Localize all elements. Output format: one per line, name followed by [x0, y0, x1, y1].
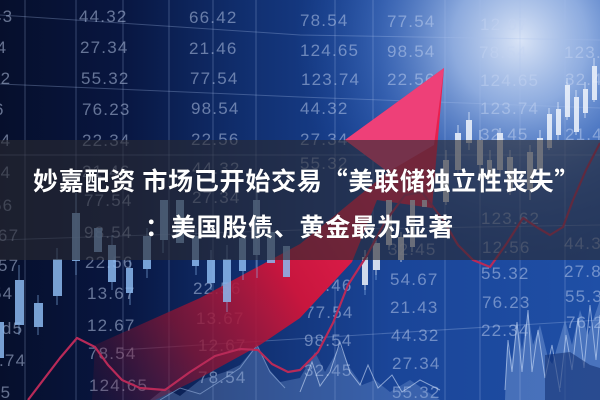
- number grid: 12.56: [482, 238, 531, 257]
- number grid: 22.34: [82, 131, 131, 150]
- number grid: 44.32: [391, 326, 440, 345]
- number grid: 55.32: [481, 264, 530, 283]
- waveform chart: [150, 300, 600, 400]
- number grid: 54.67: [390, 270, 439, 289]
- title line 2: ：美国股债、黄金最为显著: [145, 208, 454, 244]
- number grid: 78.54: [479, 43, 528, 62]
- number grid: 22.56: [191, 130, 240, 149]
- number grid: 124.65: [300, 41, 359, 60]
- number grid: 27.34: [192, 188, 241, 207]
- number grid: 98.54: [84, 223, 133, 242]
- red arrow: [92, 68, 444, 400]
- number grid: 78.54: [88, 344, 137, 363]
- number grid: 123.74: [301, 70, 360, 89]
- number grid: 55.32: [300, 154, 349, 173]
- number grid: 98.54: [191, 99, 240, 118]
- number grid: 44.32: [192, 159, 241, 178]
- number grid: 12.67: [480, 15, 529, 34]
- number grid: 78.54: [300, 11, 349, 30]
- number grid: 124.65: [89, 376, 148, 395]
- number grid: 22.56: [85, 253, 134, 272]
- number grid: 44.32: [79, 7, 128, 26]
- number grid: 32.45: [388, 240, 437, 259]
- number grid: 27.34: [300, 130, 349, 149]
- number grid: 77.54: [387, 12, 436, 31]
- number grid: 13.67: [196, 309, 245, 328]
- number grid: 32.45: [304, 361, 353, 380]
- candlesticks: [0, 58, 597, 358]
- number grid: 98.54: [387, 42, 436, 61]
- number grid: 32.45: [480, 125, 529, 144]
- number grid: 21.43: [390, 298, 439, 317]
- number grid: 78.54: [198, 368, 247, 387]
- number grid: 123.74: [480, 99, 539, 118]
- number grid: 22.56: [387, 70, 436, 89]
- number grid: 44.32: [300, 99, 349, 118]
- number grid: 77.54: [305, 303, 354, 322]
- number grid: 21.46: [82, 162, 131, 181]
- number grid: 22.56: [193, 279, 242, 298]
- number grid: 12.67: [198, 336, 247, 355]
- number grid: 76.23: [82, 100, 131, 119]
- number grid: 124.65: [480, 71, 539, 90]
- number grid: 12.67: [87, 316, 136, 335]
- number grid: 77.54: [84, 191, 133, 210]
- title band: [0, 140, 600, 260]
- number grid: 76.23: [482, 293, 531, 312]
- red trend line: [28, 143, 600, 400]
- number grid: 21.46: [304, 276, 353, 295]
- number grid: 21.46: [189, 39, 238, 58]
- number grid: 22.34: [481, 321, 530, 340]
- number grid: 27.34: [80, 38, 129, 57]
- number grid: 27.34: [392, 354, 441, 373]
- arrow head highlight: [345, 68, 444, 172]
- number grid: 77.54: [190, 69, 239, 88]
- number grid: 66.42: [189, 8, 238, 27]
- number grid: 98.54: [304, 331, 353, 350]
- number grid: 123.62: [481, 209, 540, 228]
- title line 1: 妙嘉配资 市场已开始交易“美联储独立性丧失”: [33, 162, 580, 198]
- number grid: 13.67: [87, 284, 136, 303]
- number grid: 55.32: [81, 69, 130, 88]
